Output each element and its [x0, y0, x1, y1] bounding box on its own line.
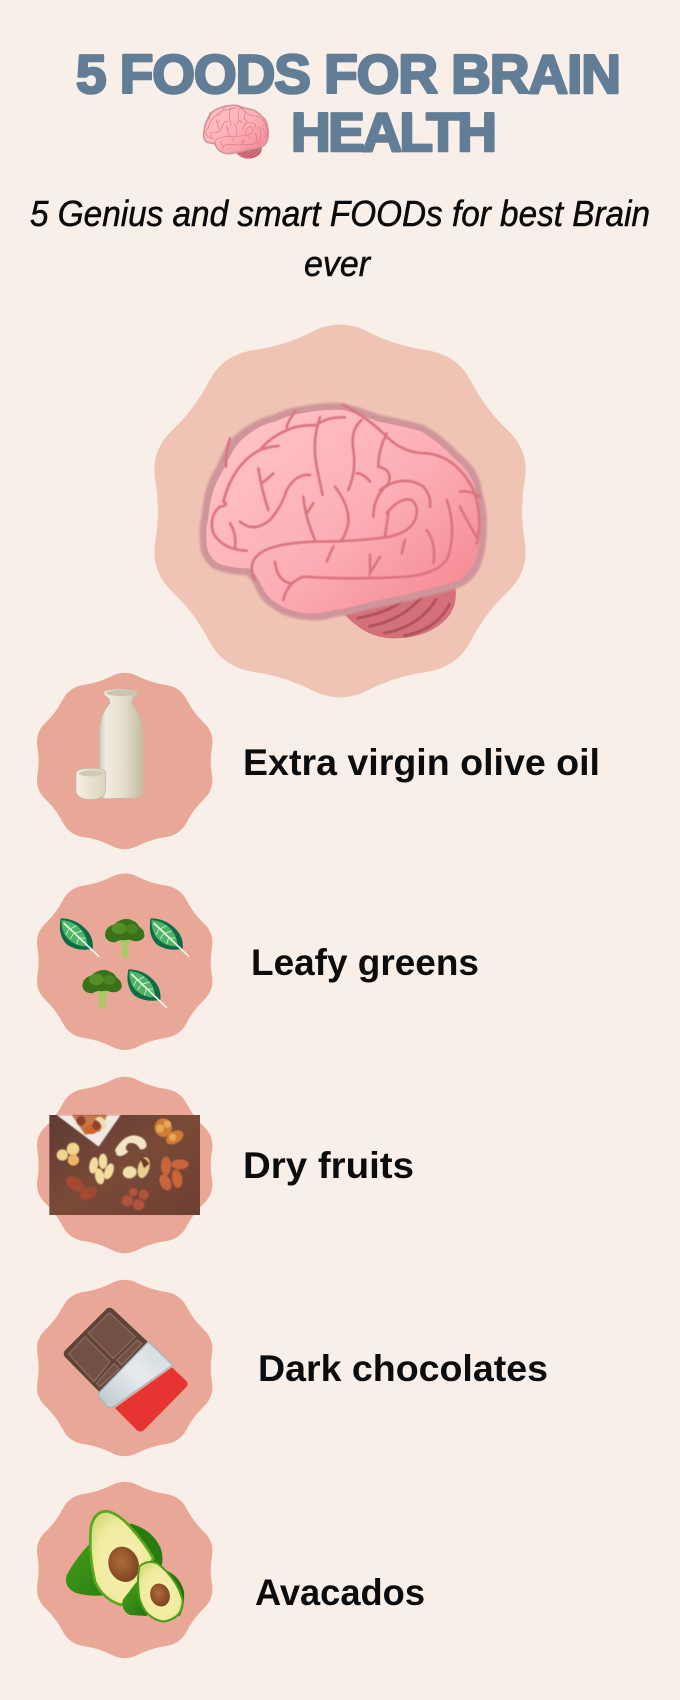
panel: big brain badge	[154, 325, 526, 697]
icon: leaves and broccoli	[60, 918, 189, 1008]
label: dark chocolates: Dark chocolates	[258, 1348, 548, 1389]
subtitle: ever	[304, 243, 372, 284]
title line two: HEALTH	[291, 101, 497, 163]
icon: chocolate bar	[64, 1308, 188, 1432]
icon: avocados	[66, 1511, 184, 1622]
subtitle	[30, 193, 650, 284]
label: avocados: Avacados	[255, 1572, 425, 1613]
label: extra virgin olive oil: Extra virgin olive oil	[243, 742, 600, 783]
panel: extra virgin olive oil	[37, 673, 600, 849]
label: leafy greens: Leafy greens	[251, 942, 479, 983]
title line one: 5 FOODS FOR BRAIN	[76, 43, 622, 105]
icon: title brain	[203, 105, 269, 159]
icon: big brain	[201, 405, 485, 638]
panel: dark chocolates	[37, 1280, 548, 1456]
panel: dry fruits	[37, 1077, 414, 1253]
panel: leafy greens	[37, 873, 479, 1050]
title	[76, 43, 622, 163]
icon: oil bottle and cup	[76, 689, 142, 800]
label: dry fruits: Dry fruits	[243, 1145, 414, 1186]
icon: nuts photo	[49, 1115, 200, 1215]
panel: avocados	[37, 1482, 425, 1658]
